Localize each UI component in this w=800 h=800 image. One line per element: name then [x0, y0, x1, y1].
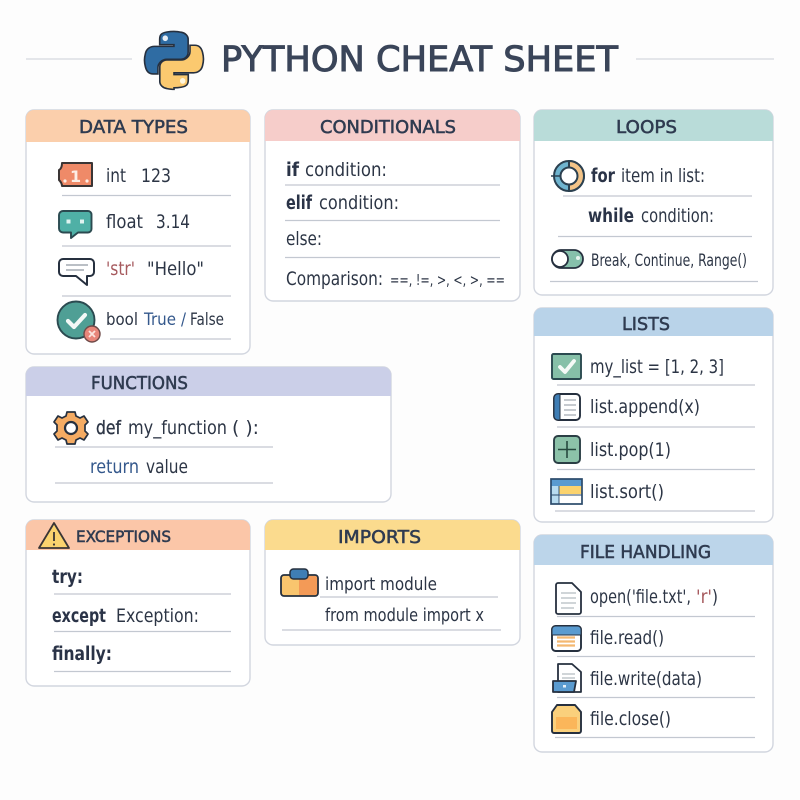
row: bool: / [181, 310, 186, 329]
icon: loop ring [551, 161, 584, 191]
panel: exceptions [26, 520, 250, 686]
icon: plus [554, 436, 580, 463]
row: int: 123 [141, 165, 171, 187]
row: str [106, 258, 204, 280]
icon: notebook [554, 394, 580, 420]
icon: int: 1 [70, 167, 81, 186]
row: import module: import module [325, 574, 437, 595]
heading: file handling: FILE HANDLING [580, 542, 711, 563]
row: if: condition: [305, 159, 387, 181]
icon: document [556, 583, 581, 614]
icon: float [59, 211, 92, 238]
row: float [106, 211, 190, 233]
panel: data types [26, 110, 250, 354]
row: bool [106, 310, 224, 329]
row: bool: True [143, 310, 176, 329]
row: float: float [106, 211, 143, 233]
icon: box [552, 705, 581, 733]
row: open: ) [712, 586, 718, 608]
icon: gear [54, 412, 88, 444]
row: def: ( ): [232, 417, 259, 439]
row: append: list.append(x) [590, 396, 700, 418]
panel: lists [534, 308, 773, 522]
icon: checkbox [552, 354, 581, 379]
icon: bool [58, 302, 100, 342]
row: int: int [106, 165, 126, 187]
row: while [588, 205, 714, 227]
row: read: file.read() [590, 627, 664, 649]
panel: functions [26, 367, 391, 502]
icon: str [59, 259, 94, 285]
row: from module import: from module import x [325, 605, 484, 626]
row: except: except [52, 606, 106, 627]
row: close: file.close() [590, 708, 671, 730]
title: PYTHON CHEAT SHEET [221, 40, 619, 80]
row: except: Exception: [116, 605, 199, 627]
row: return [90, 456, 188, 478]
row: return: return [90, 456, 139, 478]
row: comparison [286, 268, 505, 290]
heading: imports: IMPORTS [338, 527, 421, 548]
row: sort: list.sort() [590, 481, 664, 503]
row: open: open('file.txt', [590, 586, 691, 608]
row: break continue range: Break, Continue, Range() [591, 251, 747, 271]
icon: int [59, 163, 92, 186]
row: str: 'str' [106, 258, 135, 280]
row: return: value [146, 456, 188, 478]
row: elif [286, 192, 399, 214]
row: for: item in list: [621, 165, 705, 187]
row: except [52, 605, 199, 627]
row: elif: elif [286, 193, 313, 214]
row: str: "Hello" [147, 258, 204, 280]
panel: file handling [534, 535, 773, 752]
row: float: 3.14 [156, 211, 190, 233]
heading: exceptions: EXCEPTIONS [76, 527, 171, 546]
row: int [106, 165, 171, 187]
heading: loops: LOOPS [616, 117, 677, 138]
row: for: for [591, 166, 616, 187]
icon: python logo [144, 31, 203, 89]
panel: loops [534, 110, 773, 295]
heading: lists: LISTS [622, 314, 670, 335]
row: elif: condition: [319, 192, 399, 214]
row: bool: False [190, 310, 224, 329]
icon: table [551, 479, 582, 504]
icon: warning [39, 523, 69, 548]
row: def: def [96, 417, 122, 439]
row: pop: list.pop(1) [590, 439, 671, 461]
row: for [591, 165, 705, 187]
icon: write [553, 664, 581, 692]
row: write: file.write(data) [590, 668, 702, 690]
row: while: while [588, 206, 634, 227]
row: comparison: ==, !=, >, <, >, == [390, 271, 505, 289]
heading: conditionals: CONDITIONALS [320, 117, 456, 138]
row: try: try: [52, 567, 83, 588]
row: else: else: [286, 228, 322, 250]
panel: imports [265, 520, 520, 645]
icon: read window [552, 626, 581, 651]
row: def: my_function [128, 417, 227, 439]
row: open: 'r' [696, 586, 712, 608]
row: finally: finally: [52, 644, 112, 665]
icon: toggle [552, 250, 583, 268]
row: my_list: my_list = [1, 2, 3] [590, 356, 724, 378]
row: comparison: Comparison: [286, 268, 383, 290]
heading: data types: DATA TYPES [79, 117, 188, 138]
panel: conditionals [265, 110, 520, 301]
row: bool: bool [106, 310, 138, 329]
heading: functions: FUNCTIONS [91, 373, 188, 394]
row: if: if [286, 160, 300, 181]
icon: module box [281, 569, 318, 596]
row: while: condition: [641, 205, 714, 227]
